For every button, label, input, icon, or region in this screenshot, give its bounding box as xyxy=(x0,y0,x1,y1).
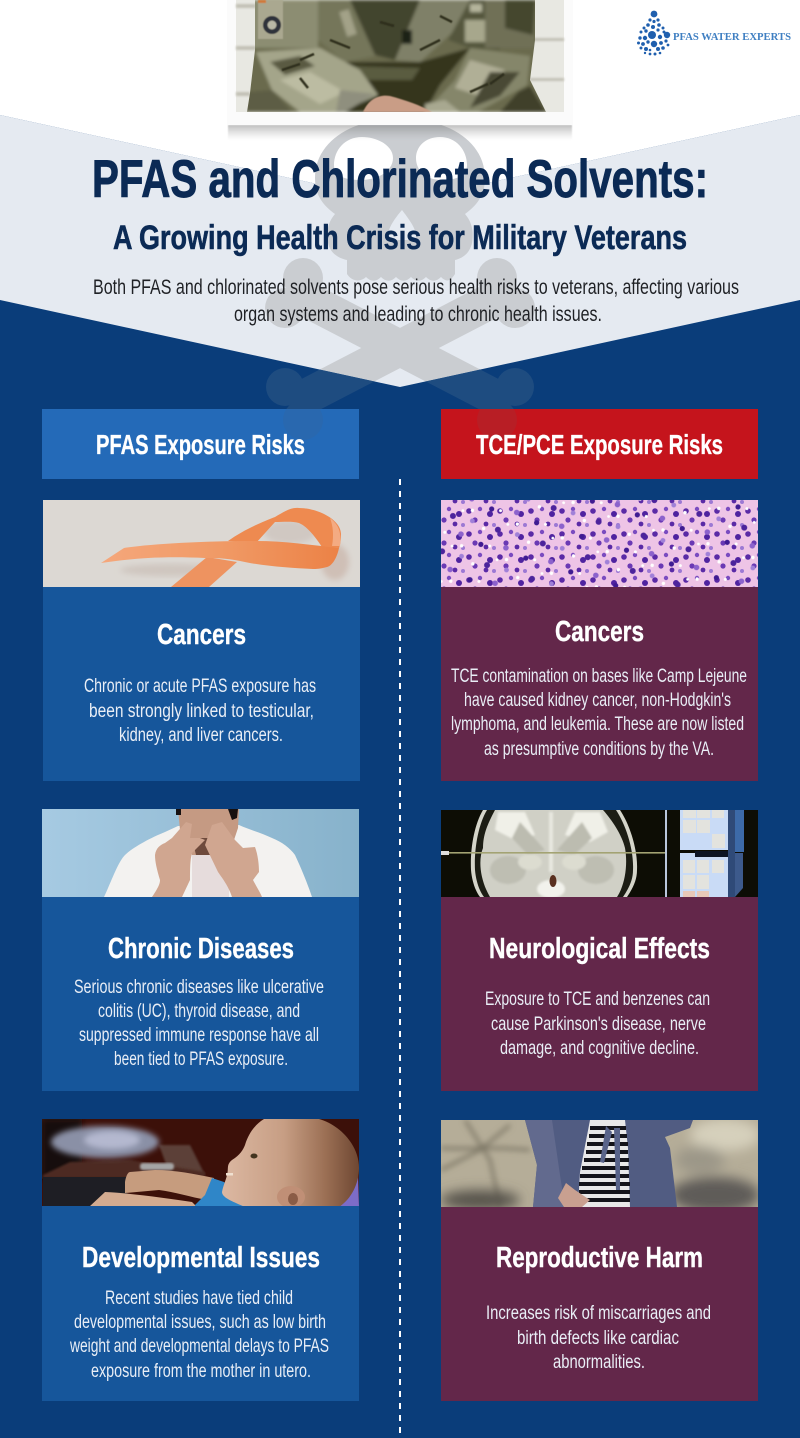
photo shadow xyxy=(228,125,572,140)
panel: reproductive harm xyxy=(440,1119,760,1401)
intro text: organ systems and leading to chronic health issues. xyxy=(234,303,602,326)
cardigan xyxy=(525,1120,693,1207)
body text xyxy=(74,977,324,1070)
body text xyxy=(486,1303,711,1373)
body text: cause Parkinson's disease, nerve xyxy=(491,1014,706,1035)
body text: been tied to PFAS exposure. xyxy=(114,1049,288,1070)
photo: pregnant woman xyxy=(441,1120,758,1207)
soldier photo card xyxy=(227,0,573,140)
body text: Exposure to TCE and benzenes can xyxy=(485,989,710,1010)
heading: TCE/PCE Exposure Risks xyxy=(441,409,758,479)
intro text xyxy=(93,276,739,326)
panel: neurological effects: Neurological Effects xyxy=(489,933,710,965)
body text: colitis (UC), thyroid disease, and xyxy=(98,1001,300,1022)
photo: tissue micrograph xyxy=(441,500,758,587)
body text: as presumptive conditions by the VA. xyxy=(484,739,714,760)
logo text: PFAS WATER EXPERTS xyxy=(673,32,791,43)
body text: Increases risk of miscarriages and xyxy=(486,1303,711,1324)
body text: birth defects like cardiac xyxy=(517,1328,679,1349)
body text xyxy=(451,666,747,760)
logo: PFAS Water Experts xyxy=(637,11,791,56)
panel: TCE/PCE cancers: Cancers xyxy=(555,616,644,648)
panel: chronic diseases: Chronic Diseases xyxy=(108,933,294,965)
panel: chronic diseases xyxy=(42,809,359,1091)
panel: TCE/PCE cancers xyxy=(441,500,758,781)
photo: brain MRI xyxy=(441,810,758,897)
hand xyxy=(558,1183,590,1207)
body text xyxy=(84,676,316,746)
body text: kidney, and liver cancers. xyxy=(119,725,283,746)
body text: been strongly linked to testicular, xyxy=(89,701,314,722)
body text: weight and developmental delays to PFAS xyxy=(69,1336,329,1357)
body text xyxy=(69,1288,329,1382)
panel: reproductive harm: Reproductive Harm xyxy=(496,1242,703,1274)
panel: PFAS cancers: Cancers xyxy=(157,619,246,651)
body text: suppressed immune response have all xyxy=(79,1025,319,1046)
body text: Serious chronic diseases like ulcerative xyxy=(74,977,324,998)
body text: damage, and cognitive decline. xyxy=(500,1038,699,1059)
striped shirt xyxy=(578,1120,630,1207)
heading: PFAS Exposure Risks: PFAS Exposure Risks xyxy=(96,429,305,460)
panel: developmental issues xyxy=(42,1119,359,1401)
heading: PFAS Exposure Risks xyxy=(42,409,359,479)
panel: neurological effects xyxy=(441,810,758,1091)
hands xyxy=(363,96,432,112)
body text: Recent studies have tied child xyxy=(105,1288,293,1309)
body text: exposure from the mother in utero. xyxy=(91,1361,311,1382)
body text: developmental issues, such as low birth xyxy=(74,1312,326,1333)
body text xyxy=(485,989,710,1059)
photo: hands on throat xyxy=(42,809,359,897)
belt ties xyxy=(600,1126,620,1190)
photo: baby at keyboard xyxy=(42,1119,359,1206)
body text: Chronic or acute PFAS exposure has xyxy=(84,676,316,697)
panel: developmental issues: Developmental Issues xyxy=(82,1242,320,1274)
icon: water drop of circles xyxy=(637,11,670,56)
body text: abnormalities. xyxy=(553,1352,645,1373)
panel: PFAS cancers xyxy=(43,500,360,781)
skull and crossbones watermark xyxy=(265,125,535,409)
photo: orange ribbon xyxy=(43,500,360,587)
